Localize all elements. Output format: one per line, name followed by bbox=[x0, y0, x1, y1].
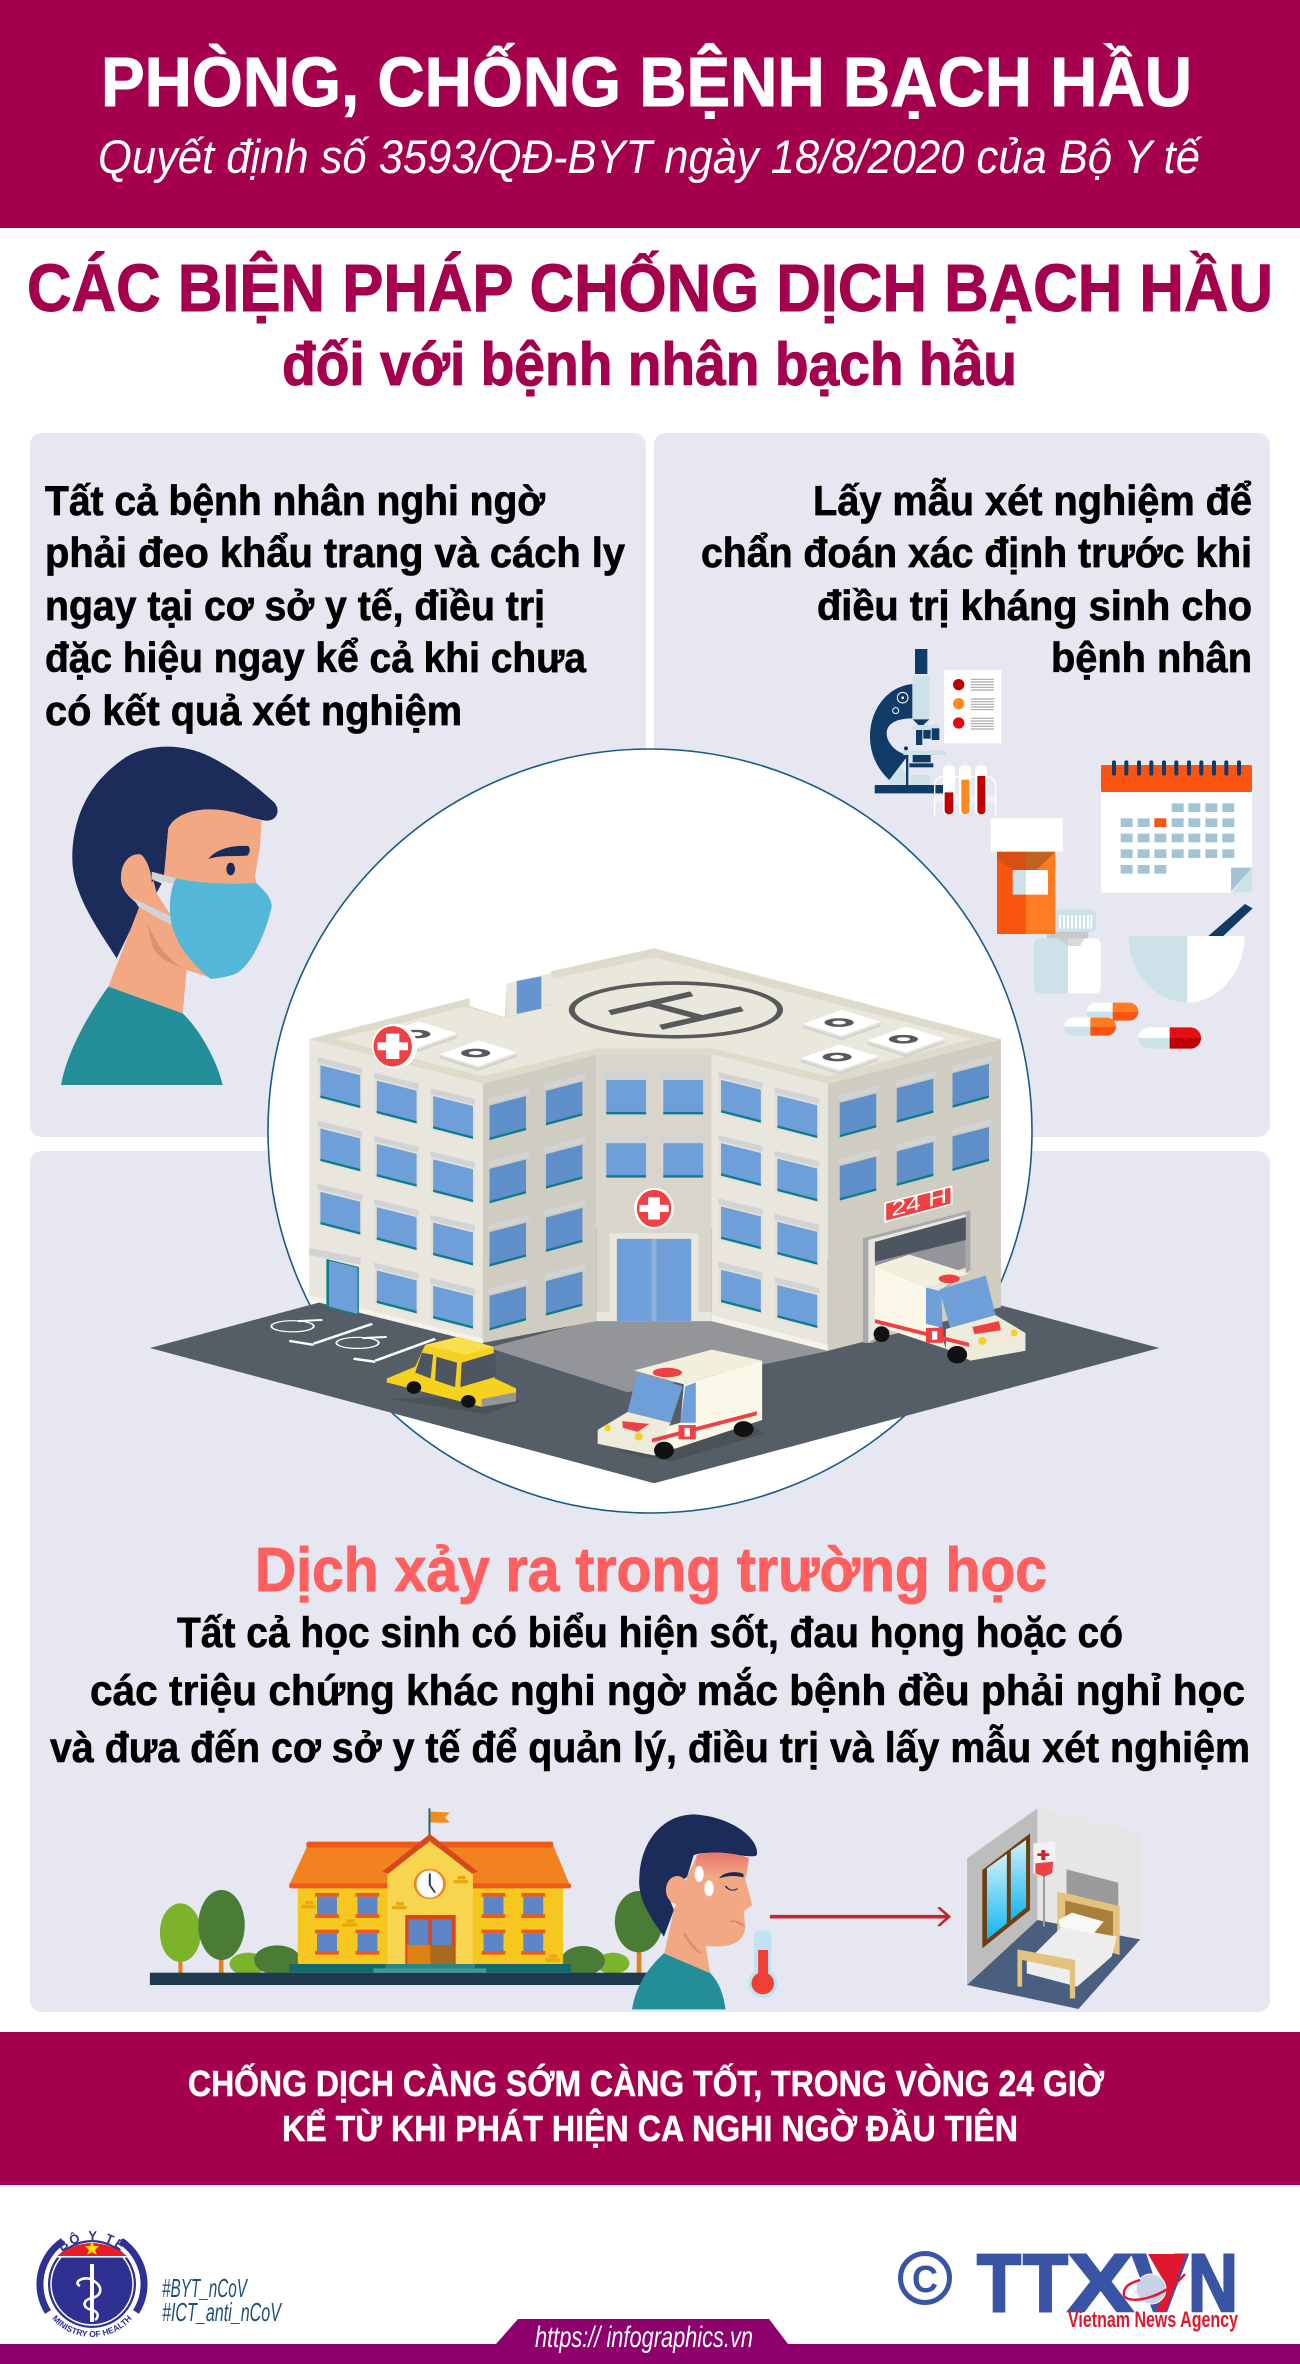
text block: school outbreak bbox=[50, 1609, 1250, 1772]
text block: testing: Lấy mẫu xét nghiệm để bbox=[813, 476, 1252, 524]
panel: school outbreak bbox=[30, 1151, 1270, 2012]
logo: ministry of health: BỘ Y TẾ bbox=[60, 2231, 127, 2252]
section subheading: đối với bệnh nhân bạch hầu bbox=[282, 331, 1017, 398]
text block: isolation: phải đeo khẩu trang và cách ly bbox=[45, 529, 626, 576]
banner: call to action: KỂ TỪ KHI PHÁT HIỆN CA NGHI NGỜ ĐẦU TIÊN bbox=[282, 2107, 1018, 2149]
helipad bbox=[572, 983, 780, 1037]
banner: call to action bbox=[0, 2032, 1300, 2185]
heading: school outbreak: Dịch xảy ra trong trường học bbox=[255, 1536, 1047, 1605]
header band bbox=[0, 0, 1300, 228]
text block: isolation: ngay tại cơ sở y tế, điều trị bbox=[45, 582, 545, 629]
courtyard bbox=[488, 1319, 830, 1392]
icon: test report bbox=[944, 670, 1001, 743]
icon: test tubes bbox=[935, 765, 996, 815]
sign: 24 H bbox=[884, 1185, 953, 1223]
white circle backdrop bbox=[268, 749, 1032, 1513]
side door bbox=[309, 1248, 361, 1315]
building walls bbox=[309, 1039, 1001, 1351]
text block: testing bbox=[701, 476, 1252, 681]
icon: mortar and pestle bbox=[1129, 904, 1253, 1003]
hashtags bbox=[162, 2273, 283, 2327]
sign: roof cross bbox=[372, 1024, 417, 1069]
logo: TTXVN bbox=[977, 2238, 1238, 2329]
icon: microscope bbox=[870, 649, 946, 793]
logo: ministry of health bbox=[36, 2231, 148, 2337]
footer band with URL tab bbox=[0, 2319, 1300, 2364]
man with fever bbox=[632, 1814, 757, 2009]
main title: PHÒNG, CHỐNG BỆNH BẠCH HẦU bbox=[101, 42, 1192, 121]
ambulance at garage bbox=[874, 1255, 1025, 1363]
logo: copyright symbol bbox=[900, 2254, 950, 2302]
garage bbox=[863, 1210, 970, 1343]
text block: isolation bbox=[45, 477, 626, 734]
logo: Vietnam News Agency: Vietnam News Agency bbox=[1068, 2307, 1239, 2332]
logo: TTXVN: N bbox=[1188, 2238, 1238, 2329]
arrow bbox=[770, 1907, 949, 1926]
logo: copyright symbol: C bbox=[912, 2259, 938, 2301]
logo: ministry of health: MINISTRY OF HEALTH bbox=[52, 2315, 132, 2337]
school with trees bbox=[150, 1808, 710, 1985]
illustration group: school scene bbox=[150, 1808, 1140, 2009]
ambulance in front bbox=[598, 1350, 763, 1461]
text block: testing: điều trị kháng sinh cho bbox=[817, 582, 1252, 629]
rooftop vents bbox=[380, 1010, 945, 1075]
windows bbox=[318, 1056, 992, 1330]
subtitle: Quyết định số 3593/QĐ-BYT ngày 18/8/2020 của Bộ Y tế bbox=[98, 130, 1203, 183]
banner: call to action: CHỐNG DỊCH CÀNG SỚM CÀNG TỐT, TRONG VÒNG 24 GIỜ bbox=[188, 2062, 1104, 2104]
text block: isolation: có kết quả xét nghiệm bbox=[45, 687, 462, 734]
footer band with URL tab: https:// infographics.vn bbox=[535, 2321, 753, 2354]
text block: isolation: đặc hiệu ngay kể cả khi chưa bbox=[45, 634, 587, 681]
icon: capsules bbox=[1064, 1003, 1201, 1049]
logo: TTXVN: T bbox=[977, 2238, 1021, 2329]
icon: man wearing mask bbox=[61, 747, 278, 1085]
roof bbox=[309, 948, 1001, 1084]
icon: thermometer bbox=[748, 1930, 777, 1998]
text block: testing: chẩn đoán xác định trước khi bbox=[701, 529, 1252, 576]
logo: TTXVN: T bbox=[1023, 2238, 1068, 2329]
logo: TTXVN: V bbox=[1132, 2238, 1188, 2329]
taxi bbox=[387, 1337, 521, 1414]
icon: orange pill bottle bbox=[991, 818, 1063, 934]
text block: testing: bệnh nhân bbox=[1051, 634, 1252, 681]
text block: isolation: Tất cả bệnh nhân nghi ngờ bbox=[45, 477, 545, 524]
text block: school outbreak: các triệu chứng khác nghi ngờ mắc bệnh đều phải nghỉ học bbox=[90, 1666, 1245, 1715]
logo: TTXVN: X bbox=[1068, 2238, 1133, 2329]
parking bays bbox=[271, 1320, 435, 1362]
icon: calendar bbox=[1101, 762, 1252, 893]
hashtags: #BYT_nCoV bbox=[162, 2273, 249, 2303]
panel: isolation bbox=[30, 433, 646, 1137]
illustration: hospital bbox=[150, 948, 1159, 1483]
hospital room bbox=[967, 1808, 1140, 2009]
sign: entrance cross bbox=[634, 1188, 674, 1229]
sign: 24 H: 24 H bbox=[891, 1185, 947, 1221]
icon: small bottle bbox=[1034, 909, 1101, 993]
hashtags: #ICT_anti_nCoV bbox=[162, 2297, 283, 2327]
main entrance bbox=[610, 1233, 698, 1321]
ground bbox=[150, 1212, 1159, 1483]
icon group: laboratory and medicine bbox=[870, 649, 1253, 1049]
panel: testing bbox=[654, 433, 1270, 1137]
text block: school outbreak: Tất cả học sinh có biểu hiện sốt, đau họng hoặc có bbox=[177, 1609, 1123, 1657]
